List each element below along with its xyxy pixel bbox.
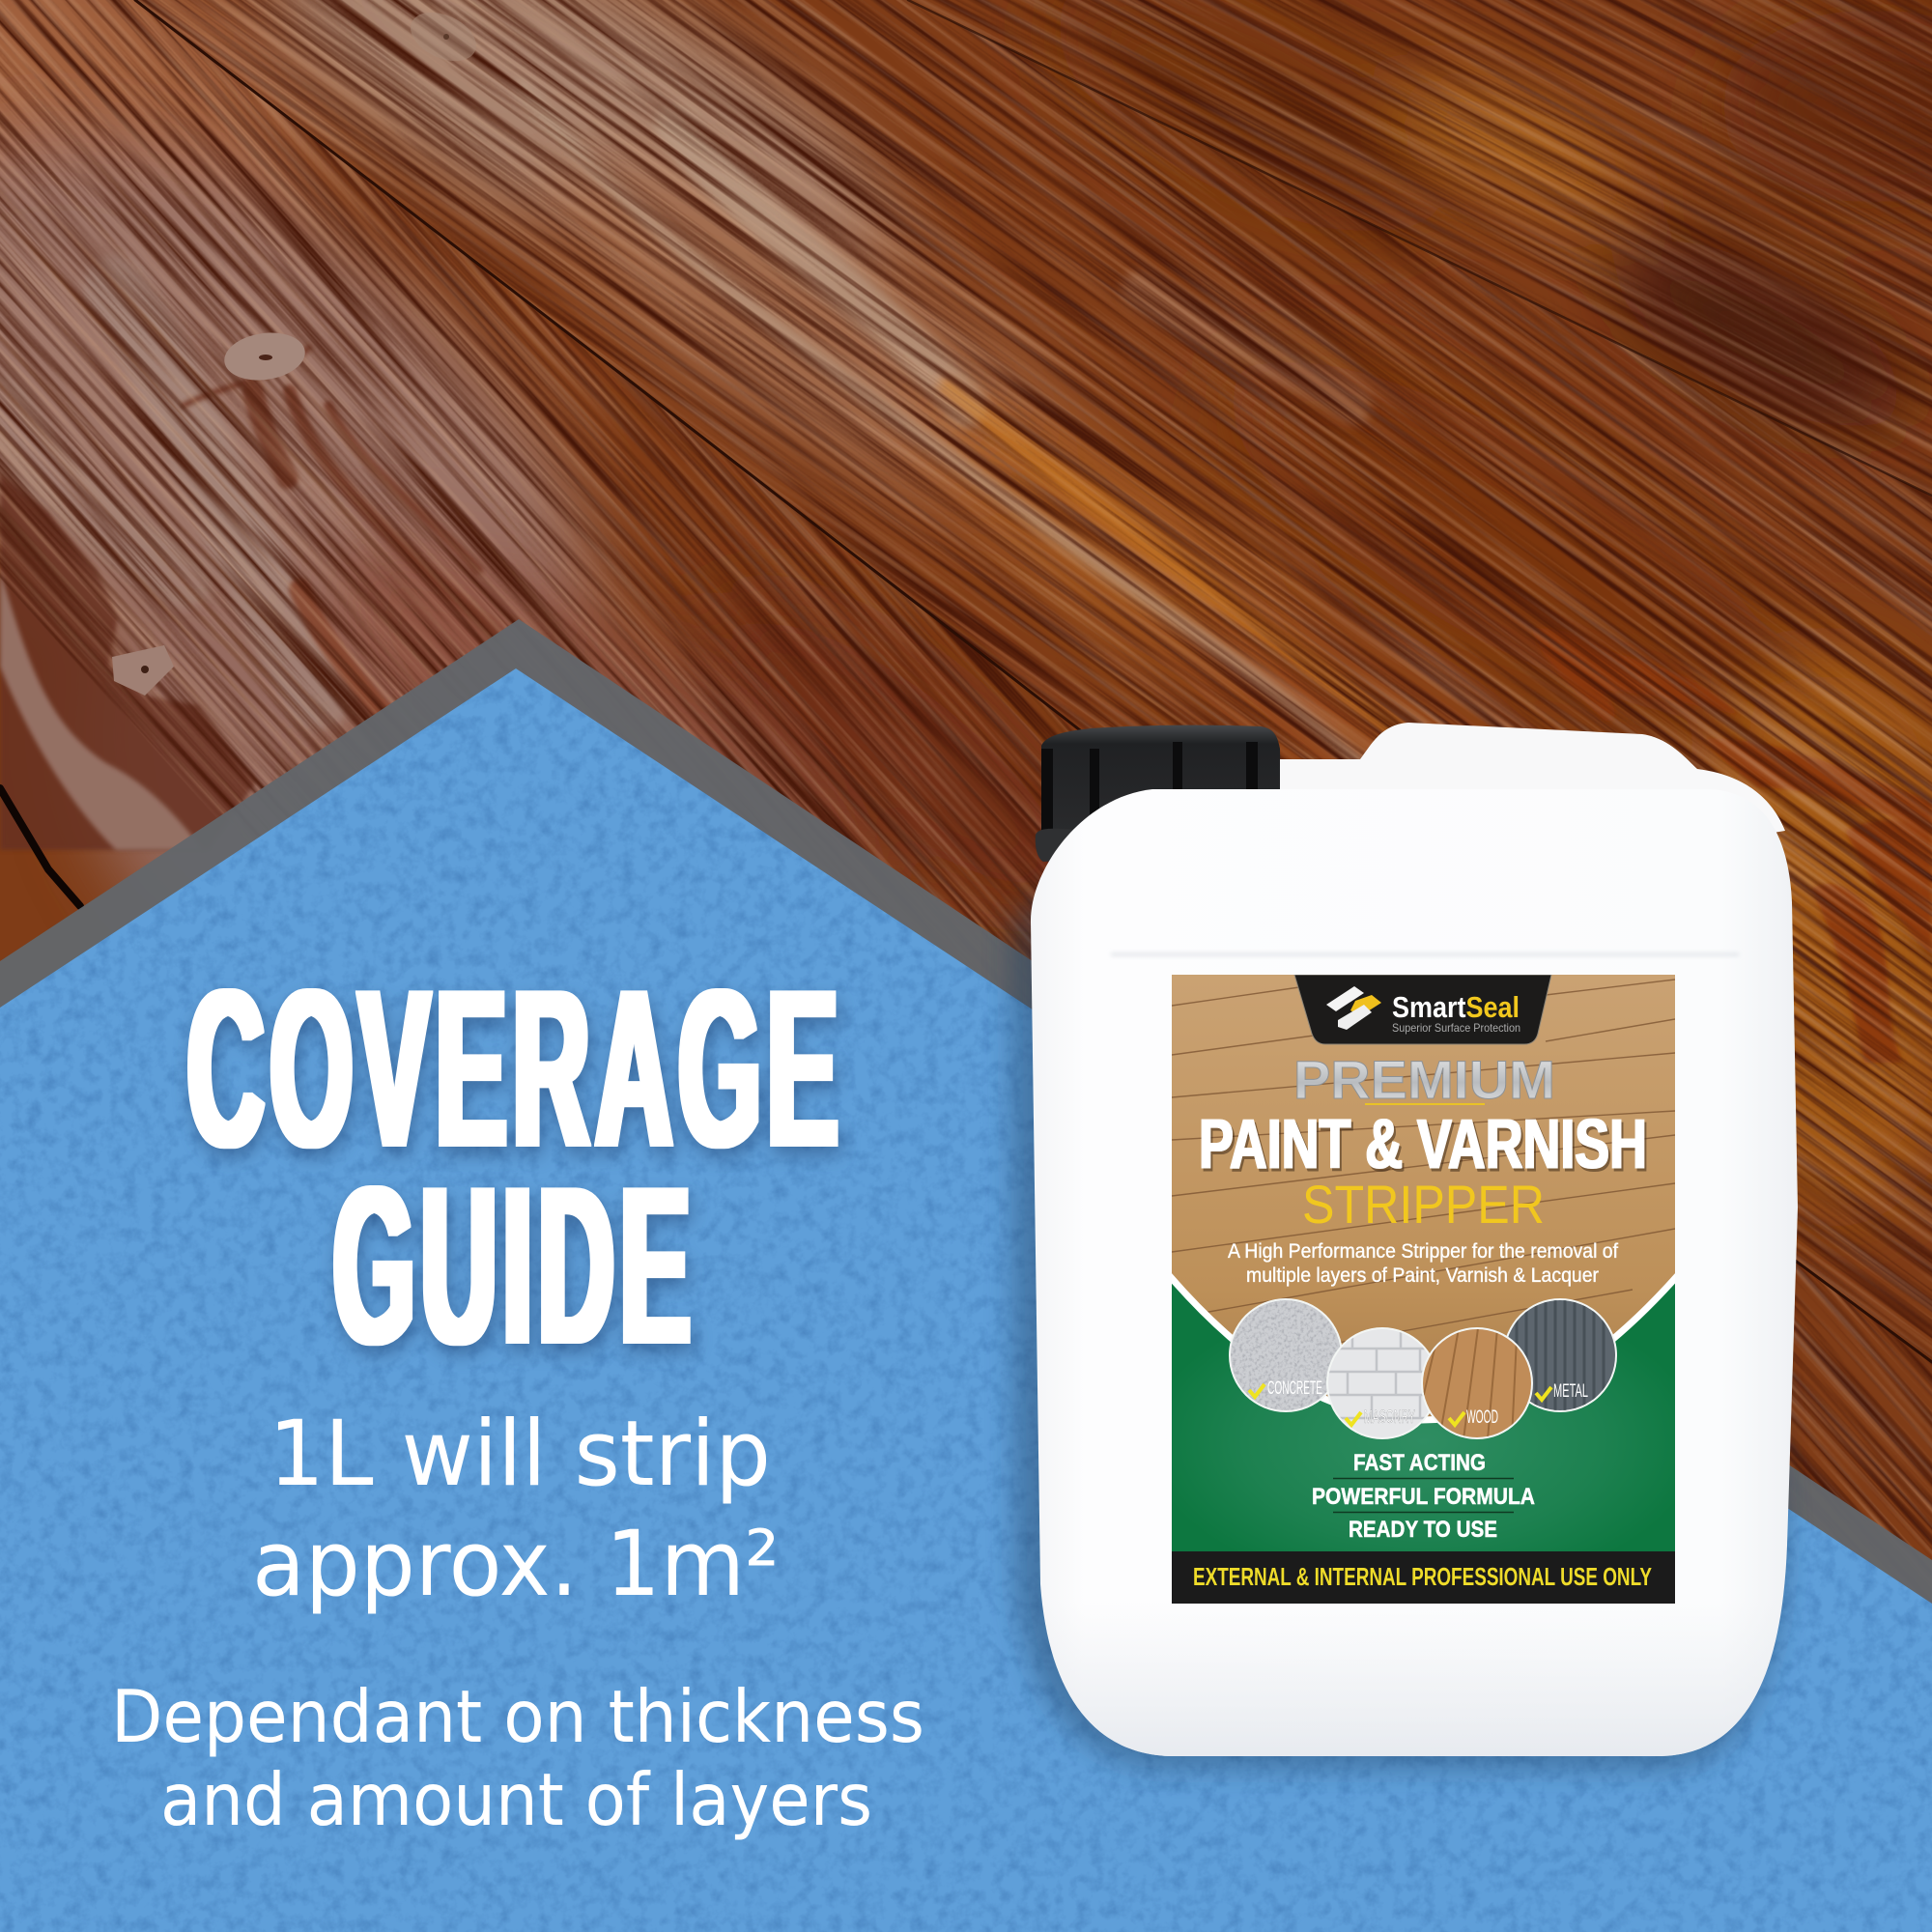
wood dark figure patches xyxy=(0,348,1932,1063)
product name: PAINT & VARNISH xyxy=(1199,1106,1647,1183)
product description xyxy=(1228,1240,1618,1287)
black footer strip xyxy=(1172,1551,1675,1604)
surface: masonry: MASONRY xyxy=(1364,1407,1415,1428)
surface: metal xyxy=(1502,1294,1618,1420)
bottle shadow xyxy=(1009,807,1787,1770)
brand name: SmartSeal xyxy=(1392,990,1520,1024)
product benefits: FAST ACTING xyxy=(1353,1450,1486,1476)
bottle body xyxy=(1031,789,1798,1756)
surface: wood xyxy=(1420,1325,1536,1443)
coverage amount text: 1L will strip xyxy=(269,1402,771,1507)
text: COVERAGE xyxy=(187,944,844,1194)
coverage amount text: approx. 1m² xyxy=(252,1512,780,1617)
brand logo mark xyxy=(1326,986,1381,1030)
green lower panel xyxy=(1172,1277,1675,1551)
title: coverage guide: GUIDE xyxy=(333,1141,696,1391)
blue textured panel xyxy=(0,668,1932,1932)
product type: STRIPPER xyxy=(1302,1174,1545,1235)
brand badge xyxy=(1294,975,1551,1044)
label wood background xyxy=(1172,975,1675,1416)
product description: A High Performance Stripper for the removal of xyxy=(1228,1240,1618,1263)
product bottle xyxy=(1009,723,1798,1770)
surface: metal: METAL xyxy=(1553,1381,1588,1402)
thickness note xyxy=(111,1674,924,1842)
plank seams xyxy=(0,0,1932,1362)
surface: concrete: CONCRETE xyxy=(1267,1378,1322,1399)
grey chevron band xyxy=(0,619,1932,1662)
product label xyxy=(1169,975,1678,1604)
product benefits: POWERFUL FORMULA xyxy=(1312,1484,1535,1510)
product benefits xyxy=(1312,1450,1535,1543)
footer text: EXTERNAL & INTERNAL PROFESSIONAL USE ONLY xyxy=(1193,1562,1652,1591)
title: coverage guide xyxy=(187,944,844,1391)
wood tonal areas xyxy=(0,0,1932,1208)
surface: masonry xyxy=(1323,1325,1441,1443)
thickness note: Dependant on thickness xyxy=(111,1674,924,1759)
product description: multiple layers of Paint, Varnish & Lacquer xyxy=(1246,1264,1599,1287)
bottle handle and shoulder xyxy=(1280,723,1785,869)
bottle cap xyxy=(1036,725,1281,862)
thickness note: and amount of layers xyxy=(160,1757,872,1842)
brand tagline: Superior Surface Protection xyxy=(1392,1021,1520,1035)
wood knots xyxy=(112,3,484,696)
wood light streaks xyxy=(0,87,1546,869)
premium heading: PREMIUM xyxy=(1293,1049,1555,1110)
product benefits: READY TO USE xyxy=(1349,1517,1497,1543)
coverage amount text xyxy=(252,1402,780,1617)
surface: concrete xyxy=(1227,1297,1345,1415)
surface: wood: WOOD xyxy=(1466,1407,1498,1428)
